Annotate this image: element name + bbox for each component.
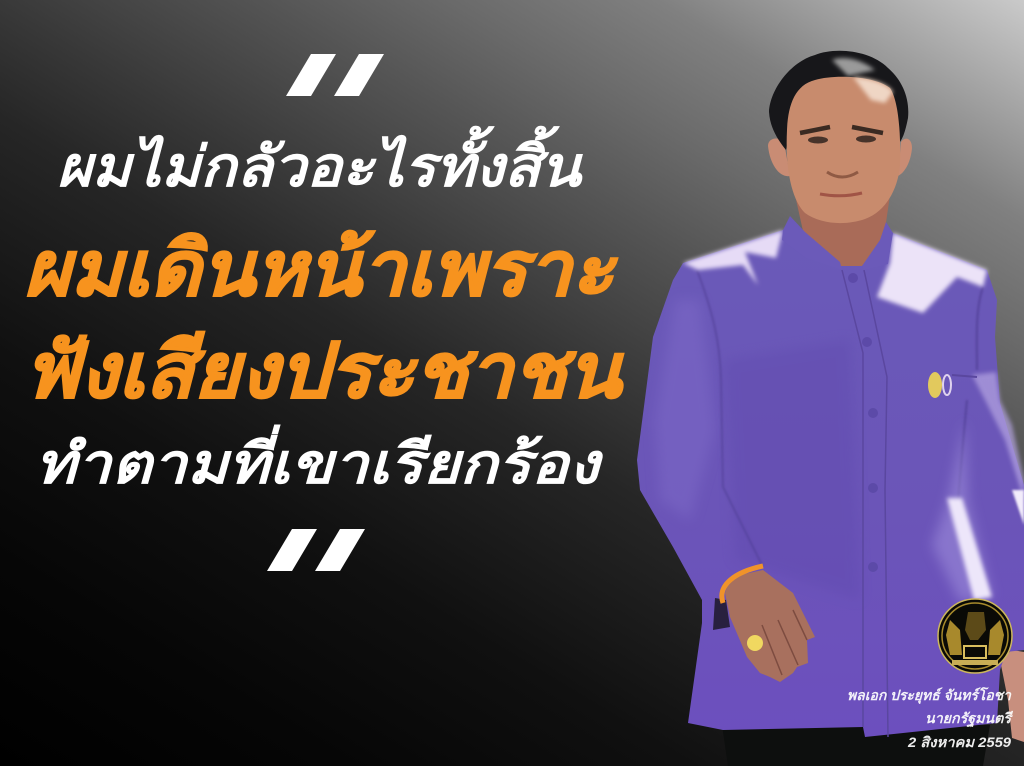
ring (747, 635, 763, 651)
pocket flap (952, 375, 977, 377)
line 2: ผมเดินหน้าเพราะ (24, 227, 618, 312)
quote mark bottom (267, 529, 365, 571)
ears (768, 139, 912, 176)
headline (23, 125, 624, 495)
title: นายกรัฐมนตรี (925, 710, 1014, 728)
wristband (722, 566, 763, 603)
emblem (938, 599, 1012, 673)
quote mark top (286, 54, 384, 96)
collar (782, 216, 893, 270)
nose (827, 172, 858, 177)
left shoulder highlight (683, 230, 783, 285)
line 4: ทำตามที่เขาเรียกร้อง (35, 424, 604, 495)
pocket pin (928, 372, 942, 398)
hair light (832, 58, 875, 76)
right edge streak (1012, 490, 1024, 525)
chest highlight right (972, 372, 1024, 500)
name: พลเอก ประยุทธ์ จันทร์โอชา (847, 686, 1012, 704)
hair (769, 51, 908, 150)
lower highlight (932, 420, 992, 602)
lower white streak (947, 498, 992, 600)
eyebrows (800, 127, 883, 133)
mouth (820, 193, 862, 196)
hand (725, 570, 815, 682)
right hand (1000, 650, 1024, 742)
cuff interior (713, 598, 730, 630)
figure: man in purple jacket (637, 51, 1024, 766)
face (787, 77, 900, 223)
sleeve light (655, 300, 715, 520)
caption (847, 686, 1014, 750)
right sleeve seam (958, 287, 983, 500)
neck (795, 195, 890, 266)
line 3: ฟังเสียงประชาชน (23, 329, 624, 414)
eyes (808, 136, 828, 144)
forehead light (853, 77, 893, 103)
trousers (722, 725, 990, 766)
jacket (637, 230, 1024, 737)
finger lines (762, 610, 807, 675)
placket (842, 270, 888, 737)
body shadow (725, 340, 860, 600)
buttons (848, 273, 878, 572)
date: 2 สิงหาคม 2559 (907, 734, 1011, 750)
right shoulder highlight (877, 233, 987, 313)
line 1: ผมไม่กลัวอะไรทั้งสิ้น (57, 125, 584, 198)
pocket ring (943, 375, 951, 395)
left sleeve seam (697, 270, 762, 565)
